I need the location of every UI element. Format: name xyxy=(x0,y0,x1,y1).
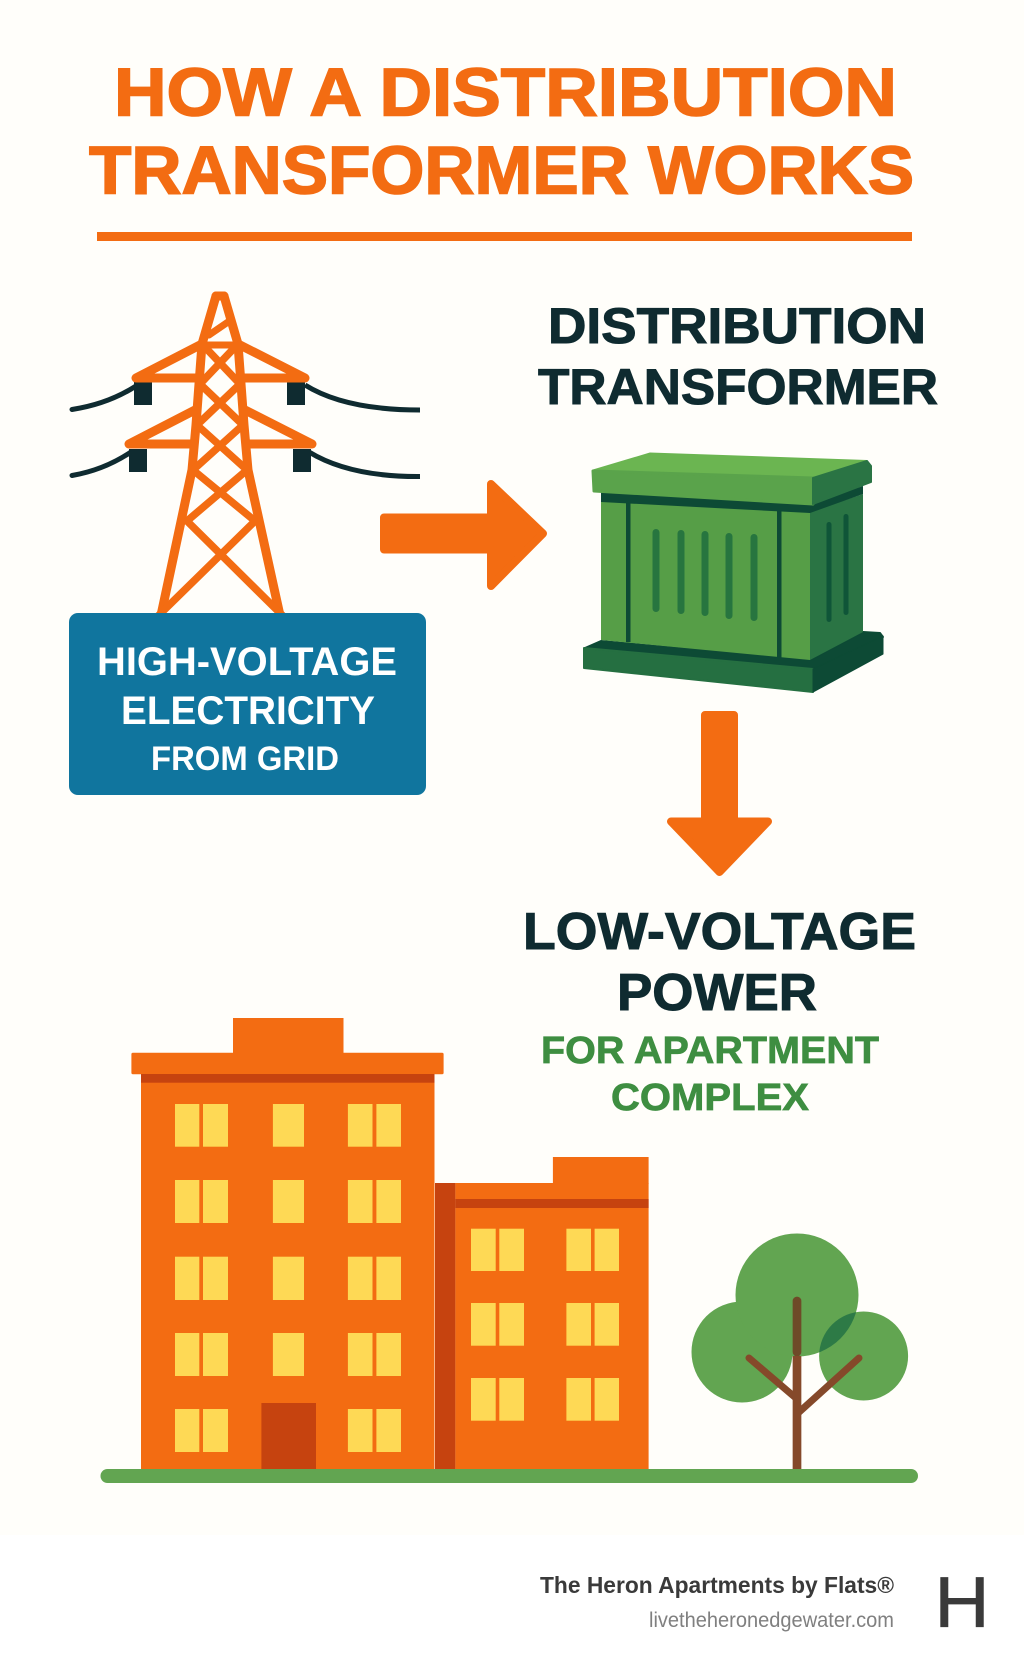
callout: high-voltage electricity: HIGH-VOLTAGE xyxy=(97,640,397,684)
windows xyxy=(175,1104,401,1452)
footer: brand name and url: The Heron Apartments by Flats® xyxy=(540,1572,894,1598)
footer: brand name and url: livetheheronedgewater.com xyxy=(649,1609,894,1632)
callout: high-voltage electricity xyxy=(69,613,426,795)
icon: transformer box xyxy=(584,453,883,692)
heading: low-voltage power xyxy=(523,903,916,1022)
arrow: grid to transformer xyxy=(384,484,543,586)
icon: tree xyxy=(692,1234,908,1470)
title: TRANSFORMER WORKS xyxy=(89,132,914,208)
side vents xyxy=(826,514,848,622)
power lines xyxy=(72,385,420,477)
body xyxy=(601,495,810,660)
subheading: for apartment complex: FOR APARTMENT xyxy=(541,1030,879,1072)
tower lattice xyxy=(129,296,312,620)
subheading: for apartment complex xyxy=(541,1030,879,1119)
insulators xyxy=(129,382,311,472)
door xyxy=(261,1403,316,1469)
windows xyxy=(471,1229,619,1421)
icon: transmission tower xyxy=(72,296,420,620)
arrow: transformer to low-voltage power xyxy=(671,715,768,872)
ground strip xyxy=(100,1469,918,1483)
icon: small apartment building xyxy=(435,1157,649,1469)
heading: distribution transformer: DISTRIBUTION xyxy=(548,297,926,354)
front vents xyxy=(652,529,758,621)
footer: H logo: H xyxy=(934,1564,990,1643)
heading: distribution transformer xyxy=(538,297,938,415)
heading: low-voltage power: LOW-VOLTAGE xyxy=(523,903,916,961)
callout: high-voltage electricity: ELECTRICITY xyxy=(121,689,375,733)
title: HOW A DISTRIBUTION xyxy=(114,54,897,130)
base xyxy=(584,632,883,692)
callout: high-voltage electricity: FROM GRID xyxy=(151,740,339,778)
heading: distribution transformer: TRANSFORMER xyxy=(538,358,938,415)
lid xyxy=(593,453,871,504)
icon: tall apartment building xyxy=(131,1018,444,1469)
footer: brand name and url xyxy=(540,1572,894,1632)
title xyxy=(89,54,914,208)
heading: low-voltage power: POWER xyxy=(617,964,817,1022)
subheading: for apartment complex: COMPLEX xyxy=(611,1077,810,1119)
